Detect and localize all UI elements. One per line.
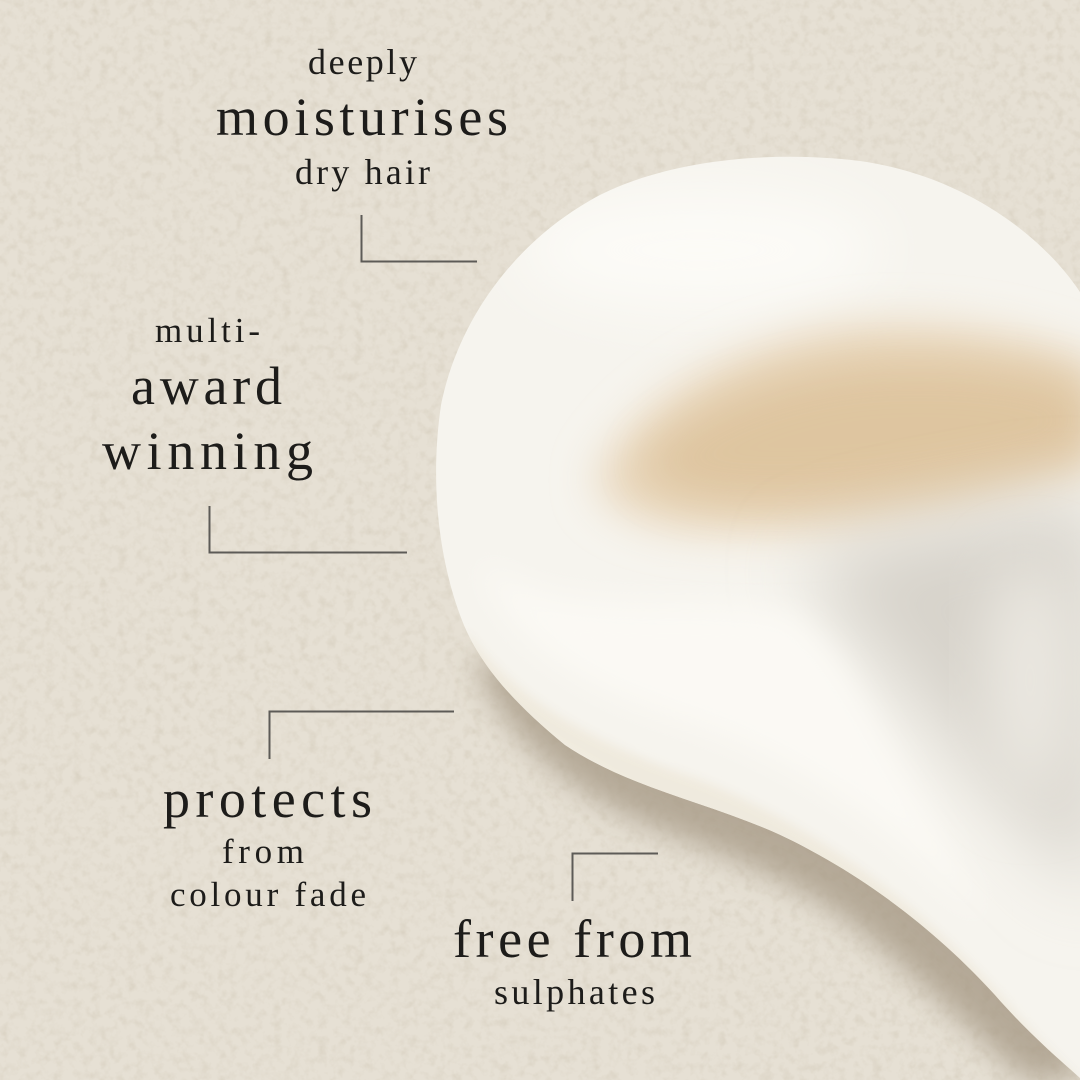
cream bright fold bbox=[786, 630, 850, 712]
connector: free from bbox=[572, 854, 658, 901]
connector: award winning bbox=[210, 506, 407, 552]
text: deeply moisturises dry hair: moisturises bbox=[216, 87, 508, 147]
text: multi-award winning: multi- bbox=[155, 311, 260, 350]
cream lower edge shading bbox=[473, 642, 1053, 1054]
text: protects from colour fade: from bbox=[222, 832, 304, 871]
text: free from sulphates bbox=[453, 909, 692, 1012]
cream swatch bbox=[436, 157, 1080, 1080]
cream tan fold bbox=[595, 324, 1080, 532]
cream grey translucent area bbox=[800, 500, 1080, 900]
text: multi-award winning bbox=[102, 311, 313, 481]
text: protects from colour fade: protects bbox=[163, 769, 372, 829]
text: deeply moisturises dry hair bbox=[216, 42, 508, 192]
text: free from sulphates: sulphates bbox=[494, 972, 655, 1012]
cream swatch shadow bbox=[474, 640, 1080, 1080]
text: multi-award winning: winning bbox=[102, 421, 313, 481]
connector: protects bbox=[270, 712, 454, 759]
connector: moisturises bbox=[362, 215, 477, 262]
text: deeply moisturises dry hair: dry hair bbox=[295, 152, 430, 192]
text: multi-award winning: award bbox=[131, 356, 282, 416]
text: deeply moisturises dry hair: deeply bbox=[308, 42, 417, 82]
cream highlight bbox=[614, 232, 786, 268]
text: free from sulphates: free from bbox=[453, 909, 692, 969]
text: protects from colour fade bbox=[163, 769, 372, 914]
text: protects from colour fade: colour fade bbox=[170, 875, 366, 914]
